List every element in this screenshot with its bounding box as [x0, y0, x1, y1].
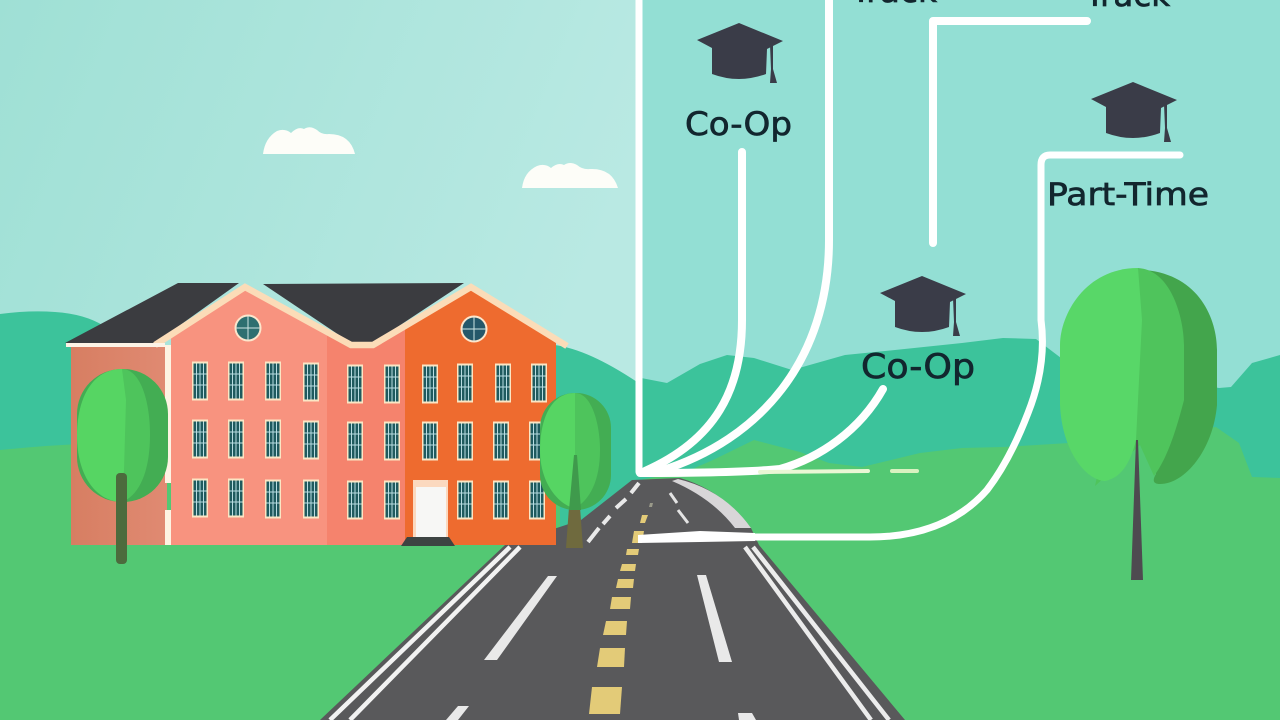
window grid [192, 362, 547, 520]
road [320, 478, 905, 720]
main pink block [171, 287, 327, 545]
building [65, 283, 567, 546]
left wing [71, 347, 167, 545]
door [413, 480, 448, 537]
centre block [327, 325, 405, 545]
foliage light [1060, 268, 1142, 481]
road far curve edge [672, 479, 751, 528]
sky left [0, 0, 640, 480]
line: upper track to second co-op [933, 21, 1087, 243]
door steps [401, 537, 455, 546]
graduation cap: co-op centre [880, 276, 966, 336]
round gable windows [236, 316, 260, 340]
hills right [636, 338, 1280, 490]
graduation cap: co-op left [697, 23, 783, 83]
orange block [405, 287, 556, 545]
road surface [320, 478, 905, 720]
line: far left vertical [636, 0, 642, 472]
tree left [77, 369, 168, 564]
right lane dashes [697, 575, 756, 720]
foliage mid [1095, 268, 1184, 486]
foliage dark [1145, 270, 1217, 484]
label: Co-Op centre: Co-Op [861, 347, 975, 387]
white pillar [165, 345, 171, 545]
roof trim [155, 287, 567, 346]
hills left [0, 311, 640, 560]
line: part-time track [700, 155, 1180, 537]
cloud left [263, 127, 355, 154]
tree right [1060, 268, 1217, 580]
line: fast track [660, 0, 829, 471]
cloud right [522, 163, 618, 188]
label: Part-Time: Part-Time [1047, 177, 1209, 213]
clouds [263, 127, 618, 188]
sky right panel [640, 0, 1280, 480]
trunk [1131, 440, 1143, 580]
line: faded dashes [760, 471, 868, 472]
right edge double line [745, 547, 889, 720]
roofs [65, 283, 464, 343]
line: second co-op [640, 389, 883, 473]
line: first co-op [645, 152, 742, 471]
graduation cap: part-time [1091, 82, 1177, 142]
left edge double line [330, 547, 520, 720]
line: part-time taper [638, 531, 755, 543]
left lane dashes [446, 576, 557, 720]
ground [0, 427, 1280, 720]
centre yellow dashes [589, 503, 653, 714]
tree middle [540, 393, 611, 548]
label: Co-Op left: Co-Op [685, 105, 792, 143]
track lines [638, 0, 1180, 543]
